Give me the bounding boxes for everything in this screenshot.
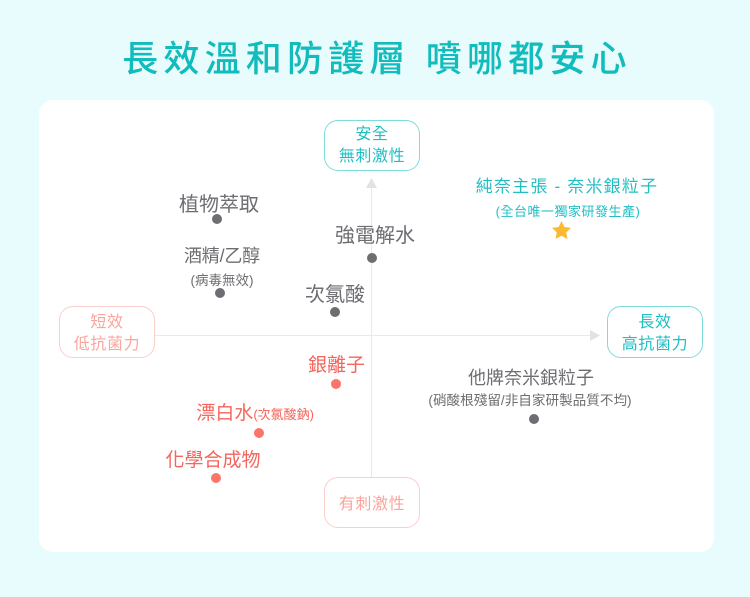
panel: positioning chart [39, 100, 714, 552]
axis label: long acting [607, 306, 703, 358]
dot [330, 307, 340, 317]
dot [211, 473, 221, 483]
item: silver ion: 銀離子 [308, 355, 365, 376]
dot [212, 214, 222, 224]
axis label: safe [324, 120, 420, 171]
dot [331, 379, 341, 389]
item note: other brand: (硝酸根殘留/非自家研製品質不均) [428, 393, 632, 408]
icon: star [552, 221, 571, 239]
axis label: short acting: 低抗菌力 [74, 336, 140, 353]
dot [215, 288, 225, 298]
axis label: irritating [324, 477, 420, 528]
axis label: irritating: 有刺激性 [339, 496, 405, 513]
item note: alcohol: (病毒無效) [190, 273, 254, 288]
item: bleach: 漂白水(次氯酸鈉) [196, 403, 314, 424]
item: other brand nano silver: 他牌奈米銀粒子 [468, 368, 594, 388]
dot [254, 428, 264, 438]
item: alcohol: 酒精/乙醇 [184, 246, 260, 266]
axis label: safe: 安全 [355, 126, 389, 143]
axis label: long acting: 長效 [638, 314, 672, 331]
item: chemical compounds: 化學合成物 [165, 450, 260, 471]
item: pure brand nano silver: 純奈主張 - 奈米銀粒子 [476, 177, 658, 196]
item: electrolyzed water: 強電解水 [335, 225, 415, 247]
dot [529, 414, 539, 424]
axis label: short acting [59, 306, 155, 358]
item note: pure brand: (全台唯一獨家研發生產) [496, 204, 640, 219]
axis label: long acting: 高抗菌力 [622, 336, 688, 353]
item: plant extract: 植物萃取 [179, 194, 259, 216]
dot [367, 253, 377, 263]
axis label: short acting: 短效 [90, 314, 124, 331]
title: 長效溫和防護層 噴哪都安心 [122, 38, 632, 79]
axis label: safe: 無刺激性 [339, 148, 405, 165]
item: hypochlorous acid: 次氯酸 [305, 284, 365, 306]
